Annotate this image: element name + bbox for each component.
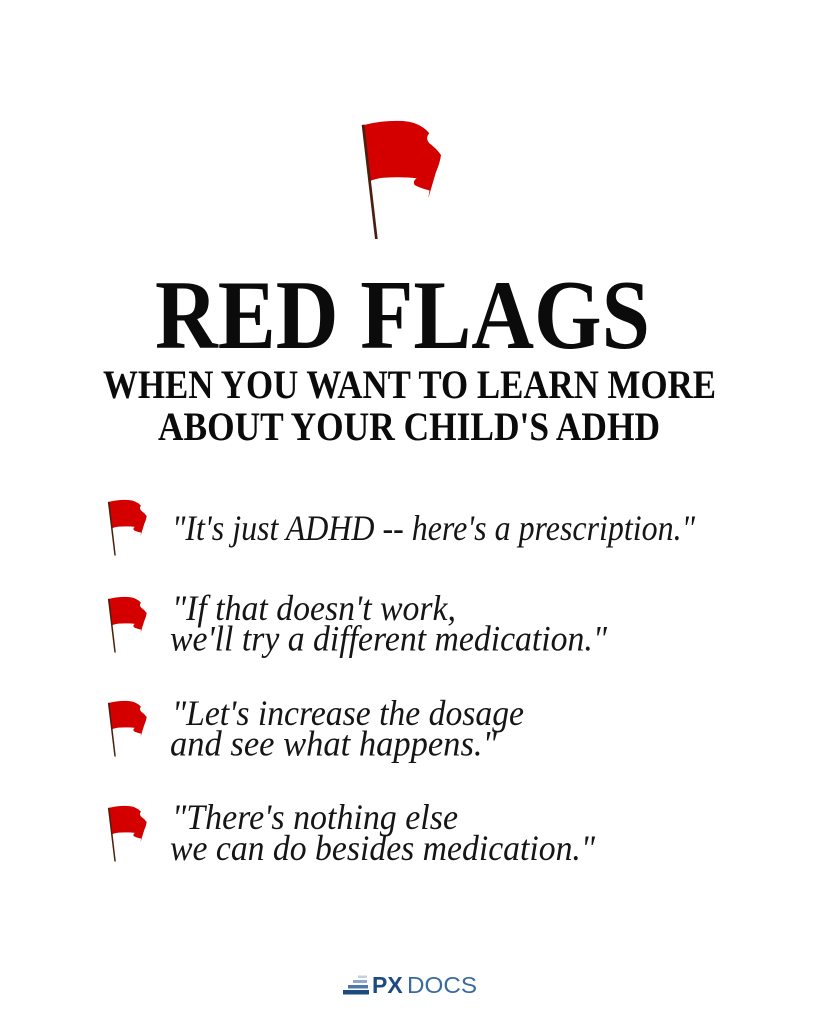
quote 1: "It's just ADHD -- here's a prescription." xyxy=(172,508,696,548)
icon: large red flag xyxy=(362,121,441,239)
icon: stair bars xyxy=(343,976,369,994)
quote 2: "If that doesn't work, xyxy=(172,588,456,628)
red flag item 2 xyxy=(108,588,608,658)
quote 4: "There's nothing else xyxy=(172,797,458,837)
quote 3: "Let's increase the dosage xyxy=(172,693,524,733)
red flag item 3 xyxy=(108,693,524,764)
logo wordmark: PX xyxy=(372,972,403,998)
icon: small flag 1 xyxy=(108,500,147,555)
subtitle: ABOUT YOUR CHILD'S ADHD xyxy=(158,404,660,449)
logo: PX DOCS xyxy=(343,972,477,998)
quote 2: we'll try a different medication." xyxy=(170,618,608,658)
red flag item 1 xyxy=(108,500,696,555)
quote 3 xyxy=(170,693,524,764)
subtitle: WHEN YOU WANT TO LEARN MORE xyxy=(103,362,716,407)
title: RED FLAGS xyxy=(155,261,650,370)
icon: small flag 4 xyxy=(108,806,147,861)
quote 4: we can do besides medication." xyxy=(170,828,596,868)
quote 3: and see what happens." xyxy=(170,724,498,764)
red flag item 4 xyxy=(108,797,596,868)
quote 2 xyxy=(170,588,608,658)
subtitle xyxy=(103,362,716,449)
icon: small flag 2 xyxy=(108,597,147,652)
quote 4 xyxy=(170,797,596,868)
logo: PX DOCS: DOCS xyxy=(407,972,477,998)
icon: small flag 3 xyxy=(108,701,147,756)
